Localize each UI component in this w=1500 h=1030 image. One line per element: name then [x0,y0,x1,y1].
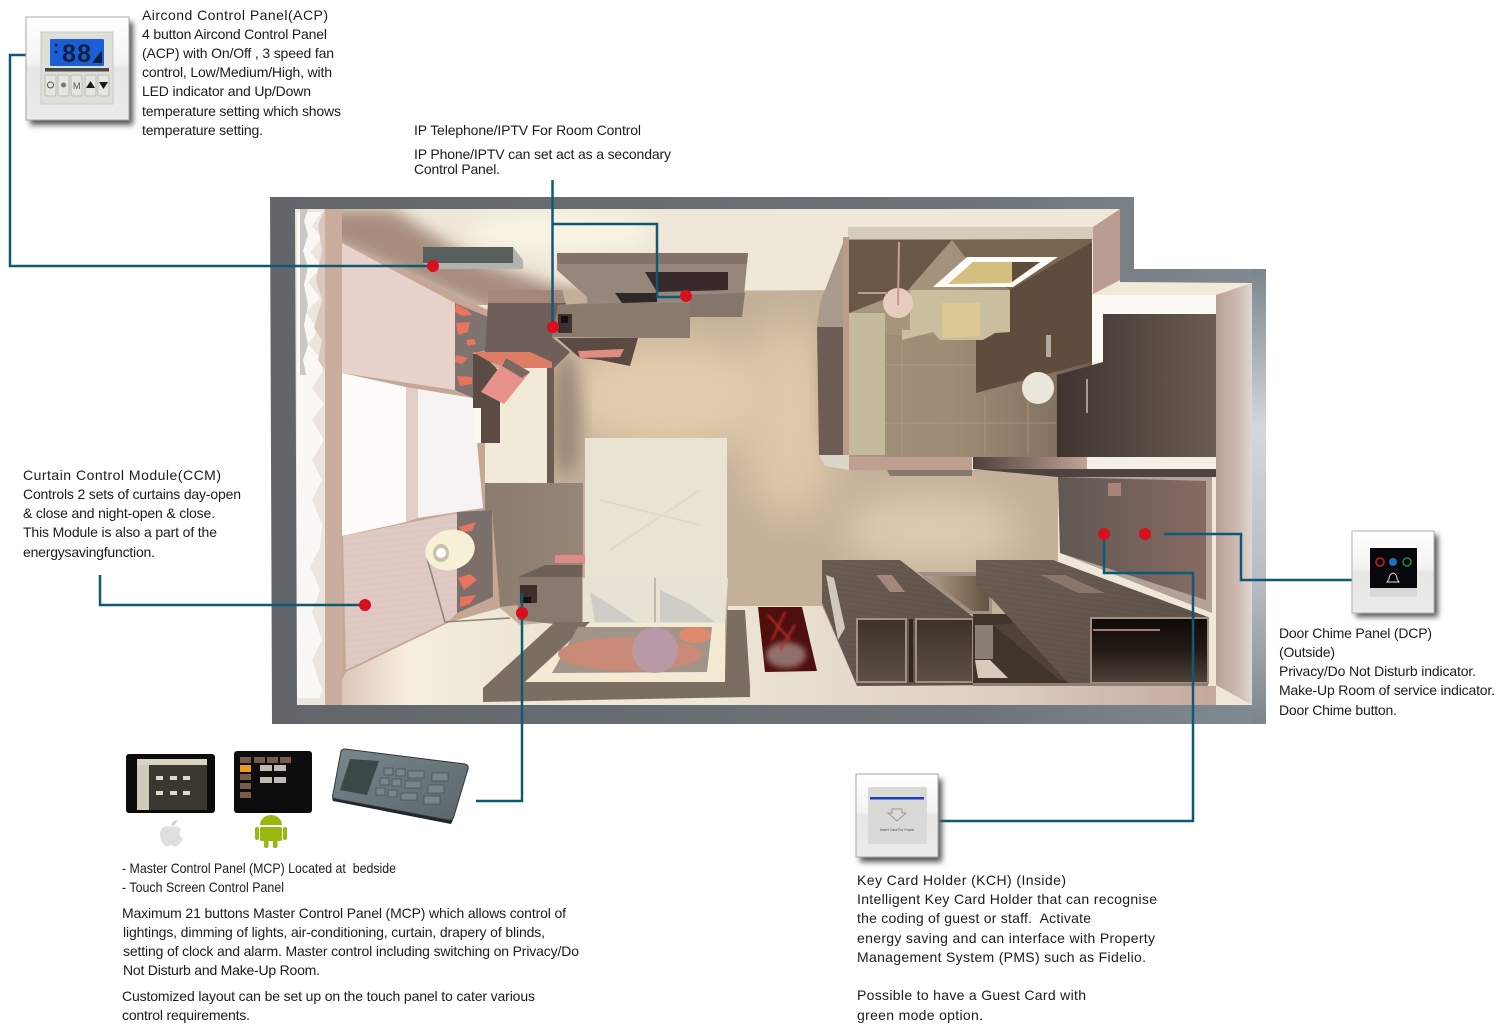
text: master control panel [122,860,579,1023]
entry wall panel [1058,477,1212,613]
text: door chime panel: Door Chime Panel (DCP) [1279,625,1432,641]
text: master control panel: control requirements. [122,1007,250,1023]
desk chair [557,338,638,366]
wardrobe right [973,560,1208,686]
closet [1057,314,1216,457]
key card holder device [856,774,942,862]
text: curtain control module: This Module is also a part of the [23,524,217,540]
text: key card holder: Key Card Holder (KCH) (Inside) [857,872,1066,888]
text: aircond control panel: temperature setting. [142,122,263,138]
bed [555,438,728,626]
text: key card holder: Management System (PMS) such as Fidelio. [857,949,1146,965]
text: aircond control panel: Aircond Control Panel(ACP) [142,7,328,23]
key card holder device: Insert Card For Power [880,828,915,832]
text: master control panel: setting of clock and alarm. Master control including switching on Privacy/Do [123,943,579,959]
text: door chime panel: Privacy/Do Not Disturb indicator. [1279,663,1476,679]
main floor [480,288,1216,705]
connector lines [10,55,1352,821]
text: key card holder: Intelligent Key Card Holder that can recognise [857,891,1157,907]
text: key card holder: Possible to have a Guest Card with [857,987,1086,1003]
text: IP telephone and IPTV: Control Panel. [414,161,500,177]
line: key card holder [940,534,1193,821]
bedside master control panel [520,585,537,603]
line: aircond panel to unit [10,55,433,266]
text: door chime panel: Make-Up Room of service indicator. [1279,682,1495,698]
bathroom glass partition [817,237,849,470]
text: aircond control panel: control, Low/Medium/High, with [142,64,332,80]
aircond control panel device: 88 [62,40,91,68]
door chime panel device [1352,531,1438,617]
icon: apple logo [160,820,183,846]
text: master control panel: lightings, dimming of lights, air-conditioning, curtain, drapery of blinds, [123,924,545,940]
wall below sofa [485,483,583,607]
walls around closet [1092,209,1252,705]
bathroom lower partition [849,457,1216,477]
text: IP telephone and IPTV [414,122,671,177]
runner rug [758,607,817,672]
tv console and desk [552,253,748,338]
floor lamp [421,524,510,622]
line: curtain module [100,575,365,605]
line: master control panel [476,593,522,801]
text: aircond control panel: LED indicator and Up/Down [142,83,311,99]
text: master control panel: - Master Control Panel (MCP) Located at bedside [122,860,396,876]
text: aircond control panel: (ACP) with On/Off , 3 speed fan [142,45,334,61]
text: IP telephone and IPTV: IP Telephone/IPTV For Room Control [414,122,641,138]
icon: android logo [255,815,287,848]
floor plan: hotel room [270,197,1266,724]
text: IP telephone and IPTV: IP Phone/IPTV can set act as a secondary [414,146,671,162]
ipad tablet [126,754,215,813]
ceiling band and floor base [295,209,1252,705]
text: aircond control panel [142,7,341,138]
text: master control panel: Not Disturb and Make-Up Room. [123,962,320,978]
text: master control panel: Customized layout can be set up on the touch panel to cater various [122,988,535,1004]
outer walls [270,197,1266,724]
line: door chime panel [1164,534,1352,580]
nightstand [518,565,582,627]
text: aircond control panel: temperature setting which shows [142,103,341,119]
text: door chime panel: Door Chime button. [1279,702,1397,718]
bathroom [848,227,1093,457]
text: key card holder: green mode option. [857,1007,983,1023]
wardrobe left [822,560,992,686]
text: curtain control module [23,467,241,560]
android tablet [234,751,312,813]
text: curtain control module: Controls 2 sets of curtains day-open [23,486,241,502]
window wall left [325,209,555,705]
air conditioner unit [423,247,523,269]
text: door chime panel [1279,625,1495,718]
curtain strips [455,303,493,613]
text: curtain control module: & close and night-open & close. [23,505,215,521]
text: curtain control module: energysavingfunction. [23,544,155,560]
aircond control panel device: M [73,81,80,91]
text: aircond control panel: 4 button Aircond Control Panel [142,26,327,42]
line: IP telephone and TV [552,180,686,327]
text: key card holder: energy saving and can interface with Property [857,930,1155,946]
sheer curtain left [297,209,342,705]
sofa [473,352,554,483]
text: key card holder: the coding of guest or staff. Activate [857,910,1091,926]
aircond control panel device [26,17,133,125]
text: key card holder [857,872,1157,1023]
text: master control panel: - Touch Screen Control Panel [122,879,284,895]
text: master control panel: Maximum 21 buttons Master Control Panel (MCP) which allows control of [122,905,566,921]
red location markers [359,260,1151,619]
text: door chime panel: (Outside) [1279,644,1335,660]
text: curtain control module: Curtain Control Module(CCM) [23,467,221,483]
back wall corner [485,290,570,370]
desk telephone [558,314,572,333]
rug and bed platform [483,610,750,702]
wall keypad control panel [332,749,468,824]
